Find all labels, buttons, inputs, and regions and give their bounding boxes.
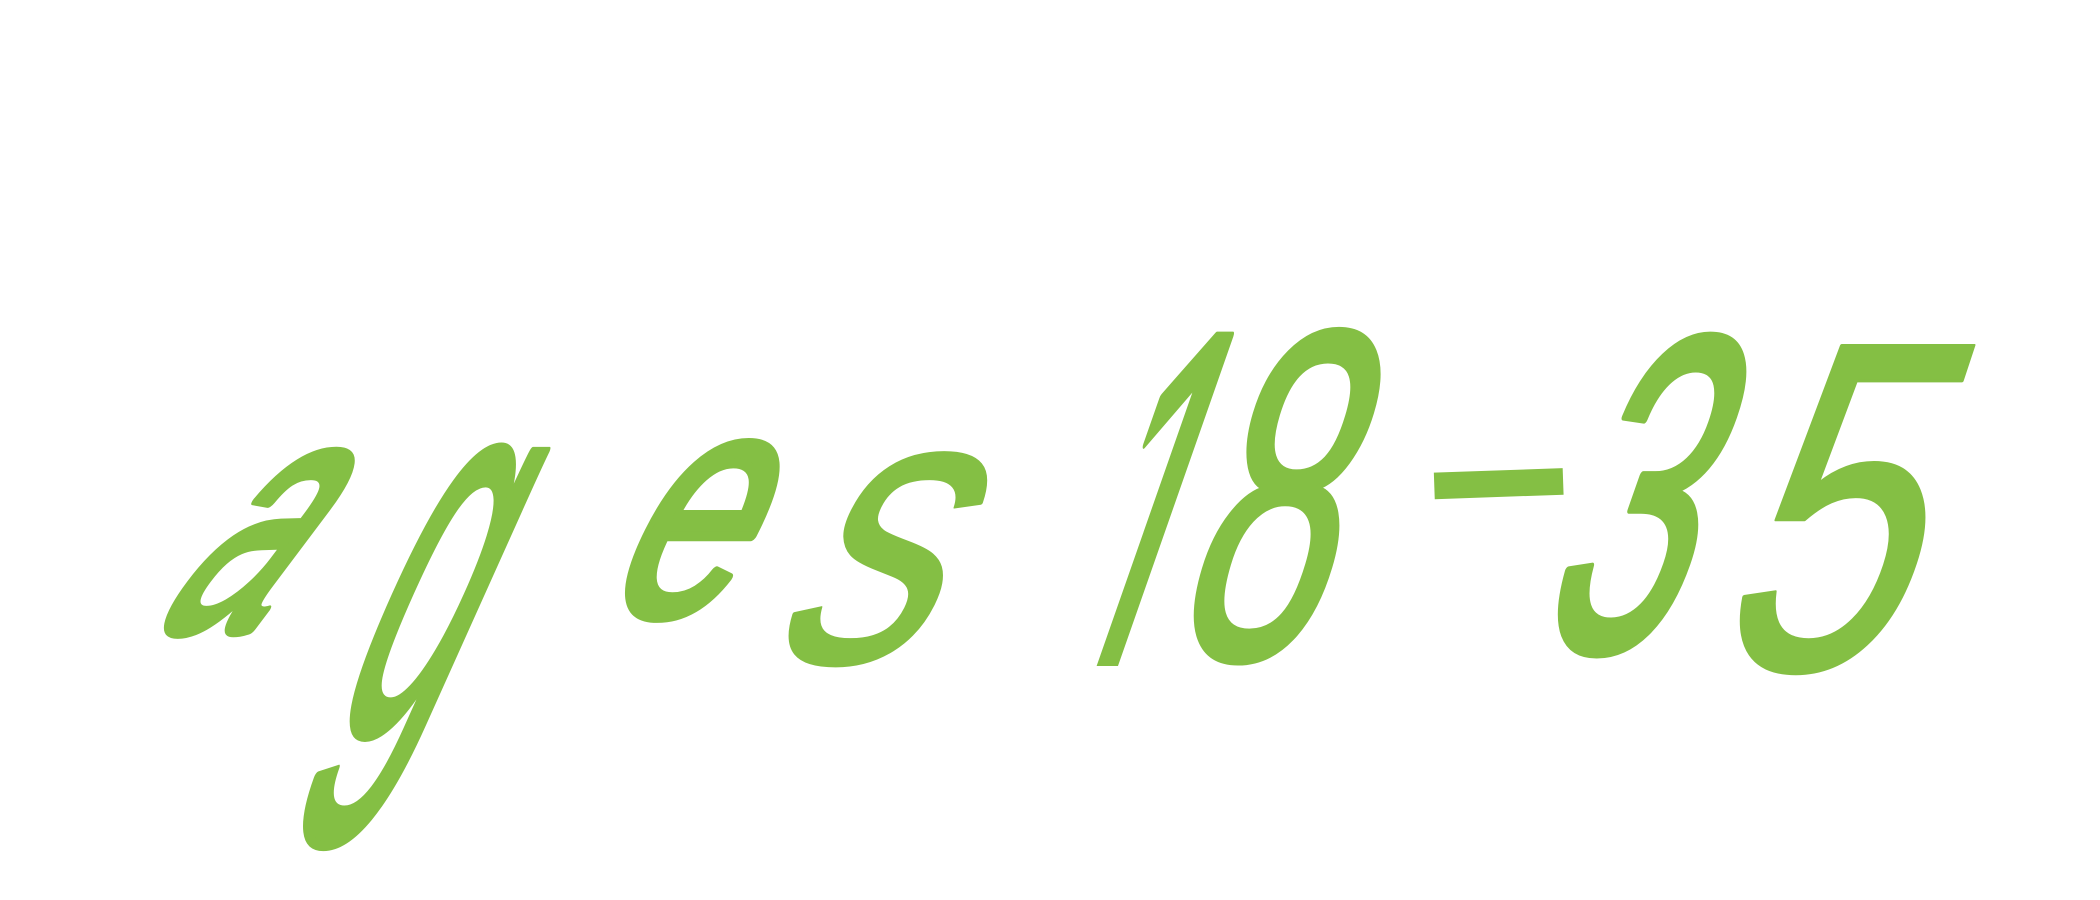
- number range: 18-35: 8: [1135, 232, 1443, 758]
- number range: 18-35: [1096, 326, 1976, 676]
- word: ages: g: [269, 251, 651, 852]
- number range: 18-35: 3: [1496, 242, 1812, 746]
- title: ages 18-35 handwritten in green: [164, 326, 1976, 852]
- word: ages: a: [93, 332, 477, 701]
- word: ages: s: [719, 309, 1093, 745]
- number range: 18-35: -: [1403, 264, 1592, 650]
- word: ages: [93, 251, 1093, 852]
- word: ages: e: [562, 326, 869, 683]
- number range: 18-35: 5: [1673, 244, 2036, 769]
- number range: 18-35: 1: [990, 219, 1316, 832]
